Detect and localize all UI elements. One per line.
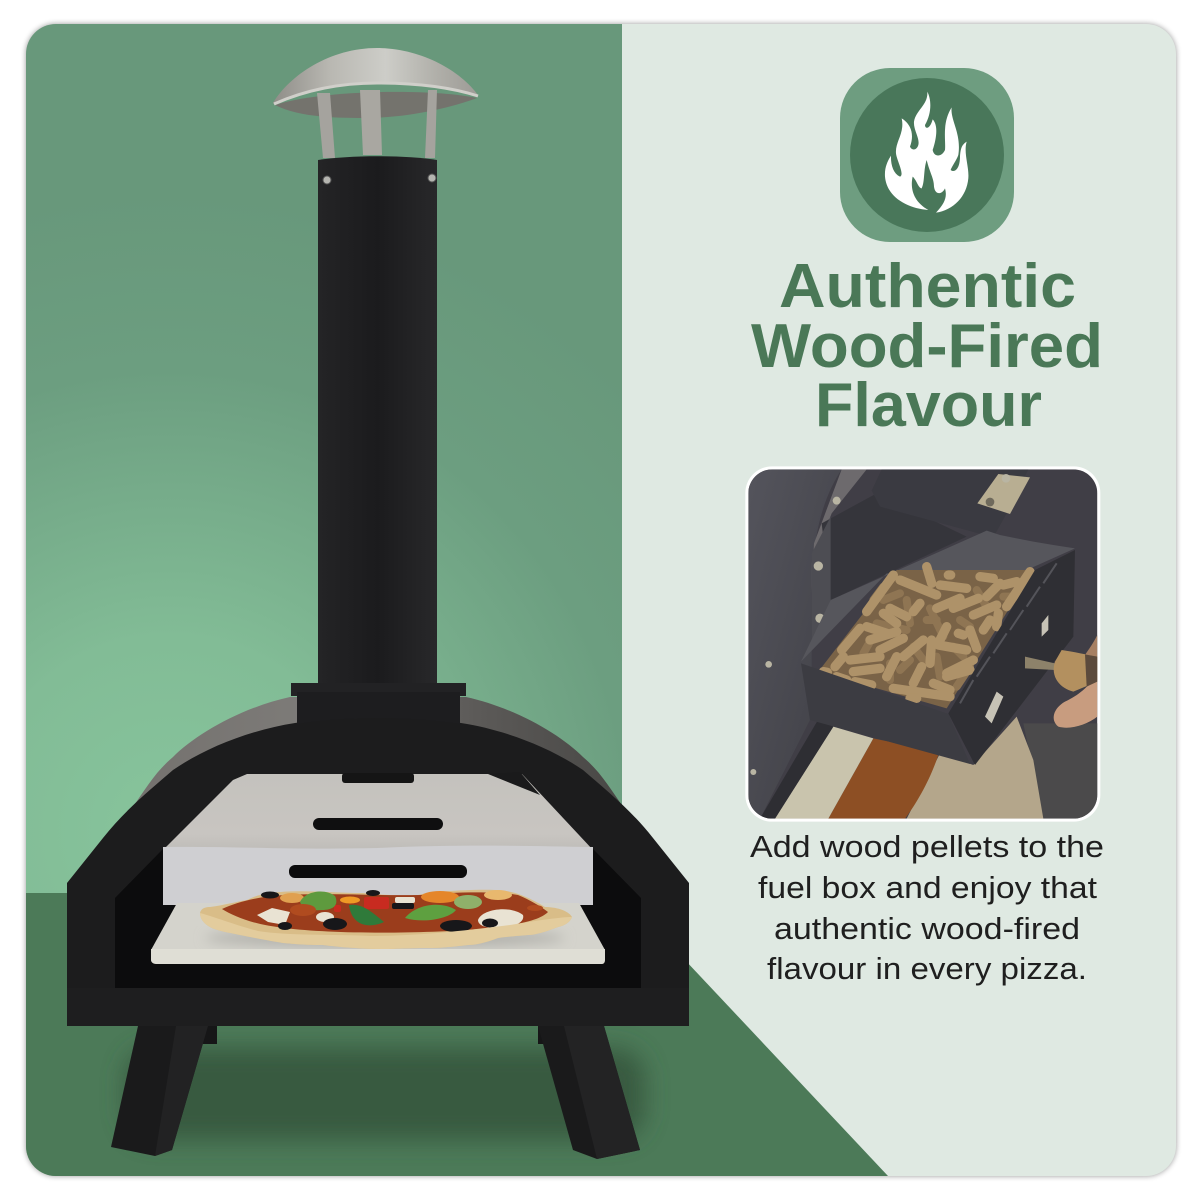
left leg facet: [155, 1026, 208, 1156]
side opening dark recess: [115, 849, 641, 988]
hinge plate: [977, 474, 1030, 514]
paving ground: [748, 469, 1097, 819]
body text: [750, 829, 1104, 986]
cheese and toppings: [257, 890, 543, 932]
oven back shell: [132, 697, 624, 808]
body text: flavour in every pizza.: [767, 951, 1087, 986]
heading: [751, 252, 1103, 440]
icon: flame badge: [840, 68, 1014, 242]
pellet bed: [818, 570, 1033, 708]
cap dome: [273, 48, 478, 105]
chimney screws: [323, 174, 436, 184]
cap rim: [274, 83, 478, 104]
paving lower right: [1023, 723, 1097, 819]
body text: Add wood pellets to the: [750, 829, 1104, 864]
left leg: [111, 1026, 208, 1156]
side bracket: [812, 517, 831, 640]
stone top: [151, 903, 605, 950]
floor with diagonal edge: [26, 893, 888, 1176]
pellets dark: [863, 587, 1017, 687]
scoop right side: [948, 550, 1075, 765]
photo content: [748, 469, 1097, 819]
side slats: [960, 563, 1057, 703]
speckled stone strip: [775, 727, 873, 819]
pellets light: [823, 567, 1030, 698]
chimney collar: [291, 683, 466, 724]
oven front arch frame: [67, 718, 689, 1000]
sauce: [222, 892, 548, 933]
stone shadow under pizza: [205, 928, 565, 948]
photo white frame: [745, 466, 1100, 822]
lid box: [882, 469, 1028, 470]
oven interior upper wall: [163, 774, 593, 860]
lower vent slot: [289, 865, 467, 878]
chimney pipe: [318, 156, 437, 690]
heading: Wood-Fired: [751, 312, 1103, 381]
stone front edge: [151, 949, 605, 964]
cork knob: [1054, 650, 1097, 692]
white chunks: [257, 897, 523, 928]
panel: right light panel: [622, 24, 1176, 1176]
oven body: [748, 469, 842, 819]
collar flange: [291, 683, 466, 696]
crust front lip: [200, 913, 572, 949]
badge circle: [850, 78, 1004, 232]
heading: Authentic: [779, 252, 1076, 321]
scoop front wall: [801, 663, 970, 764]
rear leg stubs: [203, 1026, 552, 1044]
right inner bracket: [488, 772, 540, 795]
olives: [261, 890, 498, 932]
pizza stone: [151, 903, 605, 964]
wood pellets: [823, 567, 1030, 698]
right leg facet: [564, 1026, 640, 1159]
finger above handle: [1085, 635, 1097, 657]
lighter arch edge: [812, 469, 867, 593]
badge rounded square: [840, 68, 1014, 242]
interior top notch: [342, 773, 414, 783]
body text: authentic wood-fired: [774, 911, 1080, 946]
side slots: [985, 615, 1048, 723]
icon: flame: [885, 92, 968, 213]
oven lower edge: [760, 719, 833, 819]
collar block: [297, 692, 460, 724]
floor shadow under oven: [125, 1048, 645, 1140]
panel: left gradient wall: [26, 24, 623, 1176]
knob rod: [1025, 657, 1055, 670]
right leg: [538, 1026, 640, 1159]
interior lower panel: [163, 846, 593, 905]
upper vent slot: [313, 818, 443, 830]
crust: [200, 890, 572, 949]
concrete floor: [907, 717, 1043, 819]
cap underside: [275, 92, 477, 118]
hand: [1054, 682, 1098, 728]
screws: [750, 474, 1010, 775]
wooden board: [828, 738, 938, 819]
photo: fuel box with wood pellets: [745, 466, 1100, 822]
handle wrap: [1085, 654, 1097, 687]
cap struts: [317, 90, 437, 158]
chimney cap: [273, 48, 478, 158]
pizza: [200, 890, 572, 949]
scoop back wall: [801, 531, 1075, 662]
sauce accents: [290, 904, 543, 916]
golden cheese highlights: [280, 890, 512, 904]
bracket panel: [822, 493, 967, 600]
oven base front band: [67, 988, 689, 1026]
product: pizza oven: [67, 48, 689, 1159]
basil leaves: [300, 891, 482, 925]
tomato pieces: [334, 897, 389, 912]
body text: fuel box and enjoy that: [758, 870, 1097, 905]
heading: Flavour: [815, 371, 1042, 440]
